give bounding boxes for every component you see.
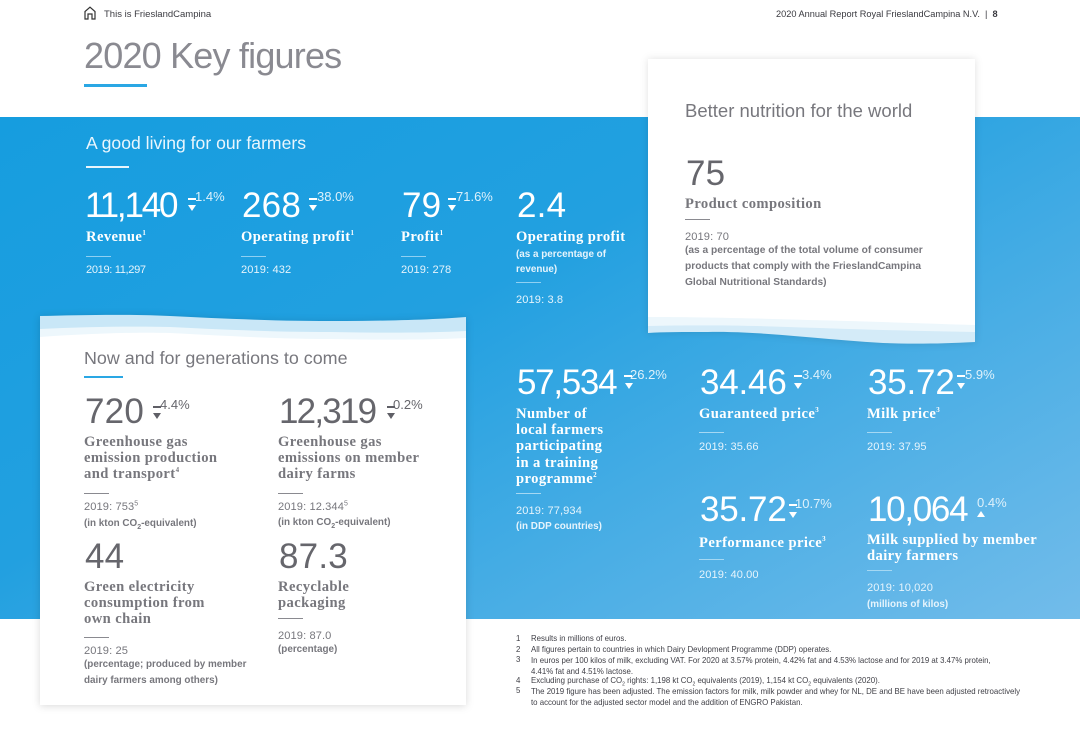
figure: recyclable packaging: (percentage) xyxy=(278,644,337,655)
figure: profit: Profit1 xyxy=(401,229,444,245)
figure: operating profit percentage: 2.4 xyxy=(517,186,566,225)
footnotes: Results in millions of euros. xyxy=(531,634,626,643)
panel shape with wave xyxy=(37,313,469,709)
figure: guaranteed price: Guaranteed price3 xyxy=(699,406,819,422)
figure: emissions on member dairy farms: emissions on member xyxy=(278,450,419,466)
panel note: Global Nutritional Standards) xyxy=(685,277,827,288)
figure: emissions on member dairy farms: (in kton CO2-equivalent) xyxy=(278,517,391,530)
figure: emissions production and transport: 720 xyxy=(85,392,144,431)
figure: emissions production and transport: (in kton CO2-equivalent) xyxy=(84,518,197,531)
breadcrumb text: This is FrieslandCampina xyxy=(104,9,211,20)
figure: milk supplied: Milk supplied by member xyxy=(867,532,1037,548)
figure: profit: 71.6% xyxy=(456,189,493,204)
figure: operating profit percentage xyxy=(516,186,626,306)
figure: profit: 2019: 278 xyxy=(401,264,451,276)
blue band background xyxy=(0,117,1080,619)
footnotes: 1 xyxy=(516,634,520,643)
figure: green electricity: dairy farmers among others) xyxy=(84,675,218,686)
figure: operating profit percentage: revenue) xyxy=(516,264,557,275)
report page reference: 2020 Annual Report Royal FrieslandCampina N.V. | 8 xyxy=(776,9,998,19)
panel note xyxy=(685,245,923,288)
figure: local farmers in training: 2019: 77,934 xyxy=(516,505,582,517)
figure: local farmers in training: (in DDP countries) xyxy=(516,521,602,532)
figure: operating profit xyxy=(241,186,354,276)
panel comparison: 2019: 70 xyxy=(685,231,729,243)
figure: operating profit: Operating profit1 xyxy=(241,229,354,245)
figure: local farmers in training: 26.2% xyxy=(630,367,667,382)
figure: revenue xyxy=(85,186,225,276)
panel shape with wave xyxy=(646,56,978,346)
footnotes: 4 xyxy=(516,676,520,685)
figure: local farmers in training: Number of xyxy=(516,406,587,422)
figure: emissions on member dairy farms: 0.2% xyxy=(393,397,423,412)
figure: green electricity: 2019: 25 xyxy=(84,645,128,657)
figure: green electricity: (percentage; produced by member xyxy=(84,659,246,670)
figure: emissions production and transport: Greenhouse gas xyxy=(84,434,188,450)
figure: profit: 79 xyxy=(402,186,441,225)
footnotes: The 2019 figure has been adjusted. The emission factors for milk, milk powder and whey for NL, DE and BE have been adjusted retroactively xyxy=(531,687,1020,696)
figure: operating profit: 268 xyxy=(242,186,301,225)
panel figure: 75 xyxy=(686,154,725,193)
figure: green electricity: 44 xyxy=(85,537,124,576)
figure: revenue: Revenue1 xyxy=(86,229,146,245)
figure: emissions on member dairy farms: 12,319 xyxy=(279,392,375,431)
panel note: (as a percentage of the total volume of consumer xyxy=(685,245,923,256)
figure: guaranteed price: 2019: 35.66 xyxy=(699,441,759,453)
figure: guaranteed price: 3.4% xyxy=(802,367,832,382)
figure: operating profit percentage: Operating profit xyxy=(516,229,626,245)
figure: performance price: 10.7% xyxy=(795,496,832,511)
figure: emissions on member dairy farms: Greenhouse gas xyxy=(278,434,382,450)
figure: local farmers in training: in a training xyxy=(516,455,598,471)
figure: operating profit: 38.0% xyxy=(317,189,354,204)
panel note: products that comply with the FrieslandCampina xyxy=(685,261,921,272)
figure: milk supplied xyxy=(867,490,1037,610)
figure: emissions on member dairy farms: dairy farms xyxy=(278,466,356,482)
panel divider xyxy=(685,219,710,220)
title: 2020 Key figures xyxy=(84,35,341,76)
figure: emissions production and transport: 2019: 7535 xyxy=(84,500,138,513)
figure: local farmers in training: programme2 xyxy=(516,471,597,487)
figure: performance price: Performance price3 xyxy=(699,535,826,551)
footnotes: 5 xyxy=(516,686,520,695)
figure: performance price xyxy=(699,490,832,581)
panel heading: Now and for generations to come xyxy=(84,348,348,368)
figure: recyclable packaging: packaging xyxy=(278,595,346,611)
figure: milk price: 2019: 37.95 xyxy=(867,441,927,453)
figure: milk price xyxy=(867,363,995,453)
footnotes: 3 xyxy=(516,655,520,664)
figure: emissions on member dairy farms: 2019: 12.3445 xyxy=(278,500,348,513)
figure: local farmers in training: participating xyxy=(516,438,602,454)
figure: milk supplied: dairy farmers xyxy=(867,548,959,564)
title underline xyxy=(84,84,147,87)
figure: local farmers in training xyxy=(516,363,667,532)
panel: better nutrition xyxy=(646,56,978,346)
figure: emissions on member dairy farms xyxy=(278,392,423,530)
figure: performance price: 35.72 xyxy=(700,490,787,529)
footnotes: Excluding purchase of CO2 rights: 1,198 kt CO2 equivalents (2019), 1,154 kt CO2 equivalents (2020). xyxy=(531,676,880,688)
figure: milk supplied: 0.4% xyxy=(977,495,1007,510)
heading: a good living for our farmers: A good living for our farmers xyxy=(86,133,306,153)
figure: milk supplied: 2019: 10,020 xyxy=(867,582,933,594)
figure: recyclable packaging xyxy=(278,537,349,655)
panel heading underline xyxy=(84,376,123,378)
figure: operating profit percentage: (as a percentage of xyxy=(516,249,606,260)
figure: emissions production and transport: 4.4% xyxy=(160,397,190,412)
figure: recyclable packaging: Recyclable xyxy=(278,579,349,595)
figure: recyclable packaging: 2019: 87.0 xyxy=(278,630,331,642)
figure: emissions production and transport xyxy=(84,392,217,531)
figure: milk supplied: (millions of kilos) xyxy=(867,599,948,610)
figure: performance price: 2019: 40.00 xyxy=(699,569,759,581)
panel: now and for generations to come xyxy=(37,313,469,709)
figure: local farmers in training: local farmers xyxy=(516,422,603,438)
figure: revenue: 11,140 xyxy=(85,186,176,225)
footnotes: to account for the adjusted sector model and the addition of ENGRO Pakistan. xyxy=(531,698,803,707)
footnotes xyxy=(516,634,1020,707)
figure: operating profit: 2019: 432 xyxy=(241,264,291,276)
figure: guaranteed price xyxy=(699,363,832,453)
figure: milk price: 5.9% xyxy=(965,367,995,382)
panel label: Product composition xyxy=(685,196,822,212)
figure: local farmers in training: 57,534 xyxy=(517,363,616,402)
figure: green electricity: own chain xyxy=(84,611,151,627)
figure: operating profit percentage: 2019: 3.8 xyxy=(516,294,563,306)
figure: milk price: Milk price3 xyxy=(867,406,940,422)
figure: revenue: 2019: 11,297 xyxy=(86,264,146,276)
figure: milk price: 35.72 xyxy=(868,363,955,402)
figure: revenue: 1.4% xyxy=(195,189,225,204)
figure: green electricity: Green electricity xyxy=(84,579,195,595)
figure: emissions production and transport: emission production xyxy=(84,450,217,466)
breadcrumb header xyxy=(84,6,212,20)
footnotes: 4.41% fat and 4.51% lactose. xyxy=(531,667,633,676)
footnotes: All figures pertain to countries in which Dairy Devlopment Programme (DDP) operates. xyxy=(531,645,831,654)
figure: green electricity xyxy=(84,537,246,686)
footnotes: 2 xyxy=(516,645,520,654)
figure: guaranteed price: 34.46 xyxy=(700,363,787,402)
icon: home xyxy=(84,6,96,20)
footnotes: In euros per 100 kilos of milk, excluding VAT. For 2020 at 3.57% protein, 4.42% fat and 4.53% lactose and for 2019 at 3.47% protein, xyxy=(531,656,991,665)
figure: green electricity: consumption from xyxy=(84,595,205,611)
figure: recyclable packaging: 87.3 xyxy=(279,537,348,576)
figure: emissions production and transport: and transport4 xyxy=(84,466,179,482)
panel heading: Better nutrition for the world xyxy=(685,100,912,121)
figure: milk supplied: 10,064 xyxy=(868,490,967,529)
heading underline xyxy=(86,166,129,168)
figure: profit xyxy=(401,186,493,276)
